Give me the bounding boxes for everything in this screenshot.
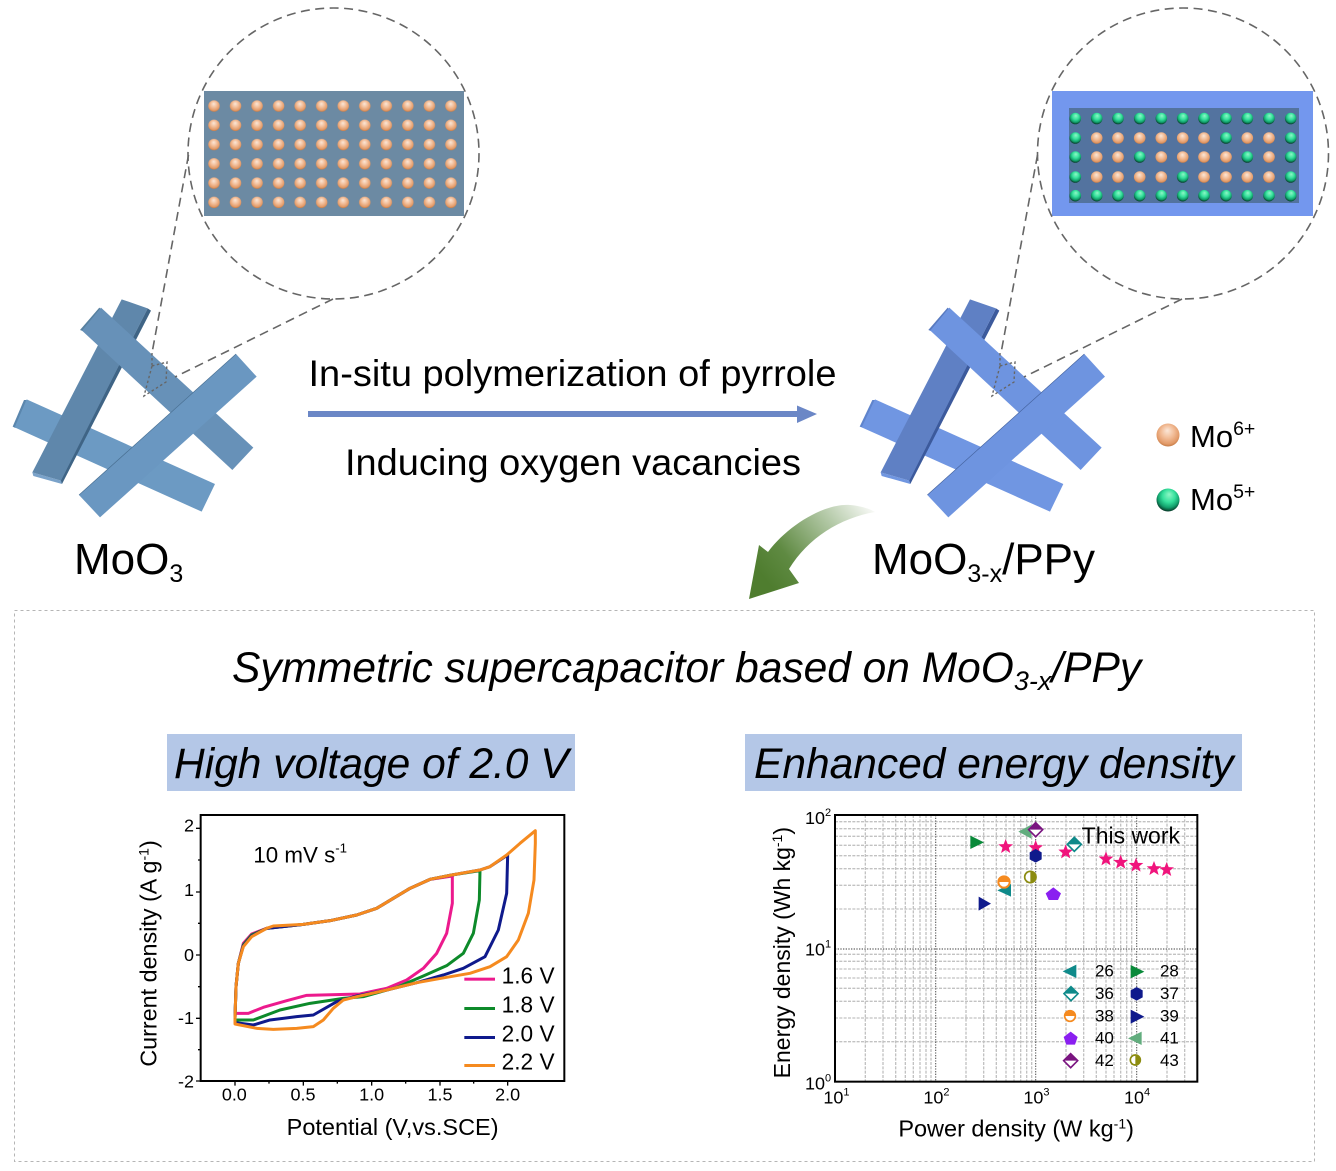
this work label: This work [1082, 822, 1181, 848]
minor grid [835, 815, 1197, 1082]
y tick labels: -1 [178, 1008, 194, 1028]
y tick labels [178, 816, 194, 1091]
heading: high voltage: High voltage of 2.0 V [174, 741, 572, 788]
y tick labels [805, 807, 831, 1093]
icon: Mo5+ atom [1156, 488, 1180, 512]
magnifier circle [1038, 8, 1328, 299]
x tick labels: 10 [1023, 1087, 1043, 1107]
marker legend: 41 [1160, 1028, 1179, 1047]
curve 2.0 V [235, 855, 508, 1025]
title: /PPy [1048, 645, 1144, 692]
y axis title: -1 [769, 834, 785, 847]
y tick labels: 2 [825, 807, 831, 819]
x tick labels: 10 [1124, 1087, 1144, 1107]
arrow: curved green [749, 505, 875, 599]
y axis title: -1 [136, 848, 152, 860]
panel: symmetric supercapacitor [14, 610, 1314, 1162]
lattice core [1069, 108, 1299, 203]
lattice rectangle with Mo6+ atoms [204, 91, 464, 216]
marker legend: 42 [1095, 1051, 1114, 1070]
label: Inducing oxygen vacancies: Inducing oxygen vacancies [345, 441, 801, 483]
icon: Mo6+ atom [1156, 424, 1180, 446]
marker legend: 38 [1095, 1007, 1114, 1026]
x tick labels: 10 [923, 1087, 943, 1107]
marker legend: 37 [1160, 984, 1179, 1003]
icon: MoO3 nanobelts [13, 299, 257, 517]
magnifier circle [188, 8, 479, 299]
x tick labels: 2.0 [495, 1085, 520, 1105]
marker legend: 36 [1095, 984, 1114, 1003]
marker legend: 28 [1160, 962, 1179, 981]
scan rate label: 10 mV s [253, 843, 335, 868]
label: Mo5+: 5+ [1233, 481, 1255, 503]
label: In-situ polymerization: In-situ polymerization of pyrrole [308, 352, 836, 394]
marker legend [1063, 962, 1179, 1070]
y tick labels: 2 [184, 816, 194, 836]
panel: MoO3 zoomed lattice [188, 8, 479, 299]
title: Symmetric supercapacitor based on MoO [232, 645, 1014, 692]
x tick labels: 0.0 [222, 1085, 247, 1105]
icon: MoO3-x/PPy nanobelts [860, 299, 1105, 517]
label: Mo6+: Mo [1190, 419, 1233, 454]
Mo5+ atoms [1070, 113, 1296, 202]
title: 3-x [1014, 666, 1053, 696]
label: MoO3-x/PPy: 3-x [967, 560, 1003, 588]
label: MoO3-x/PPy: MoO [872, 535, 967, 584]
zoom leader lines: MoO3-x/PPy [992, 155, 1182, 396]
x axis title: Potential (V,vs.SCE) [287, 1114, 499, 1140]
y axis title: Energy density (Wh kg [769, 847, 795, 1078]
curve 1.8 V [235, 871, 480, 1020]
y tick labels: -2 [178, 1071, 194, 1091]
x tick labels: 0.5 [290, 1085, 316, 1105]
curve 2.2 V [235, 831, 535, 1029]
legend: 1.8 V [502, 992, 555, 1018]
chart: CV curves [136, 815, 564, 1140]
axes frame [835, 815, 1197, 1082]
x tick labels [823, 1086, 1150, 1107]
y tick labels: 1 [184, 880, 194, 900]
legend: 2.0 V [502, 1021, 555, 1047]
label: MoO3-x/PPy: /PPy [1002, 535, 1095, 584]
legend: 2.2 V [502, 1048, 555, 1074]
y axis title: ) [136, 840, 162, 848]
label: MoO3: MoO [74, 535, 169, 584]
legend [464, 962, 555, 1074]
marker legend: 26 [1095, 962, 1114, 981]
y axis title: Current density (A g [136, 860, 162, 1067]
label: MoO3: 3 [169, 560, 183, 588]
axes frame [201, 815, 564, 1081]
legend: Mo oxidation states [1156, 418, 1255, 517]
x tick labels [222, 1085, 520, 1105]
heading: enhanced energy density: Enhanced energy density [754, 741, 1236, 788]
y axis title: ) [769, 827, 795, 835]
Mo6+ atoms [1091, 132, 1275, 183]
y tick labels: 1 [825, 939, 831, 951]
x tick labels: 1.0 [359, 1085, 384, 1105]
x axis title: -1 [1114, 1116, 1126, 1132]
chart: Ragone plot [769, 807, 1197, 1142]
y tick labels: 0 [184, 945, 194, 965]
this work stars [998, 839, 1174, 876]
x axis title: Power density (W kg [898, 1116, 1114, 1142]
zoom leader lines: MoO3 [144, 155, 333, 396]
x tick labels: 10 [823, 1087, 843, 1107]
x axis title: ) [1126, 1116, 1134, 1142]
panel: MoO3-x/PPy zoomed lattice [1038, 8, 1328, 299]
legend: 1.6 V [502, 962, 555, 988]
PPy coating rectangle [1052, 91, 1313, 216]
marker legend: 43 [1160, 1051, 1179, 1070]
curve 1.6 V [235, 876, 452, 1018]
x tick labels: 1 [843, 1086, 849, 1098]
x tick labels: 2 [943, 1086, 949, 1098]
x tick labels: 3 [1043, 1086, 1049, 1098]
arrow: reaction [308, 406, 817, 423]
major grid [835, 815, 1197, 1082]
y tick labels: 10 [805, 940, 825, 960]
y tick labels: 10 [805, 808, 825, 828]
comparison markers [970, 823, 1081, 911]
label: Mo6+: 6+ [1233, 418, 1255, 440]
marker legend: 40 [1095, 1028, 1114, 1047]
label: Mo5+: Mo [1190, 482, 1233, 517]
y tick labels: 0 [825, 1072, 831, 1084]
y tick labels: 10 [805, 1073, 825, 1093]
x tick labels: 4 [1144, 1086, 1150, 1098]
x tick labels: 1.5 [427, 1085, 453, 1105]
marker legend: 39 [1160, 1007, 1179, 1026]
scan rate label: -1 [335, 841, 347, 856]
